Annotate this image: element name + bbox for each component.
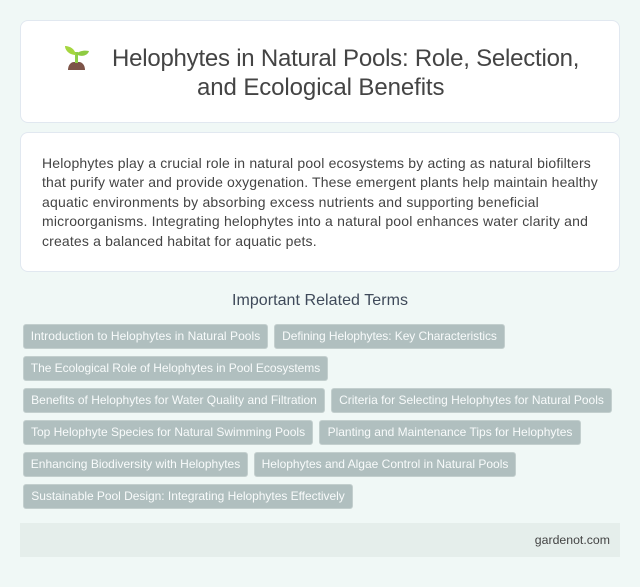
tag list: related terms — [23, 324, 612, 509]
tag — [23, 388, 325, 413]
tag — [331, 388, 612, 413]
panel: introduction text card — [20, 132, 620, 272]
tag — [23, 420, 313, 445]
tag — [23, 452, 248, 477]
tag: Introduction to Helophytes in Natural Pools — [31, 329, 260, 343]
text block: introduction: microorganisms. Integrating helophytes into a natural pool enhances water clarity and — [42, 213, 588, 229]
tag — [254, 452, 516, 477]
icon: seedling — [65, 46, 89, 70]
footer credit: gardenot.com — [535, 533, 610, 547]
tag — [23, 324, 268, 349]
tag: Enhancing Biodiversity with Helophytes — [31, 457, 240, 471]
tag — [23, 484, 353, 509]
heading: important related terms: Important Related Terms — [232, 292, 408, 309]
text block: introduction: creates a balanced habitat for aquatic pets. — [42, 233, 317, 249]
tag — [319, 420, 581, 445]
title: Helophytes in Natural Pools: Role, Selection, — [112, 45, 579, 72]
tag: Planting and Maintenance Tips for Helophytes — [328, 425, 572, 439]
title — [112, 45, 579, 101]
tag — [274, 324, 505, 349]
text block: introduction: that purify water and provide oxygenation. These emergent plants help maintain healthy — [42, 174, 598, 190]
footer bar — [20, 523, 620, 557]
text block: introduction: aquatic environments by absorbing excess nutrients and supporting beneficial — [42, 194, 539, 210]
tag: Defining Helophytes: Key Characteristics — [282, 329, 497, 343]
tag: Helophytes and Algae Control in Natural Pools — [262, 457, 508, 471]
title: and Ecological Benefits — [197, 74, 444, 101]
tag: Criteria for Selecting Helophytes for Natural Pools — [339, 393, 604, 407]
tag: Sustainable Pool Design: Integrating Helophytes Effectively — [31, 489, 345, 503]
tag: Benefits of Helophytes for Water Quality and Filtration — [31, 393, 317, 407]
panel: title card — [20, 20, 620, 123]
tag: The Ecological Role of Helophytes in Pool Ecosystems — [31, 361, 320, 375]
tag: Top Helophyte Species for Natural Swimming Pools — [31, 425, 305, 439]
text block: introduction — [42, 155, 598, 249]
tag — [23, 356, 328, 381]
text block: introduction: Helophytes play a crucial role in natural pool ecosystems by acting as natural biofilters — [42, 155, 591, 171]
